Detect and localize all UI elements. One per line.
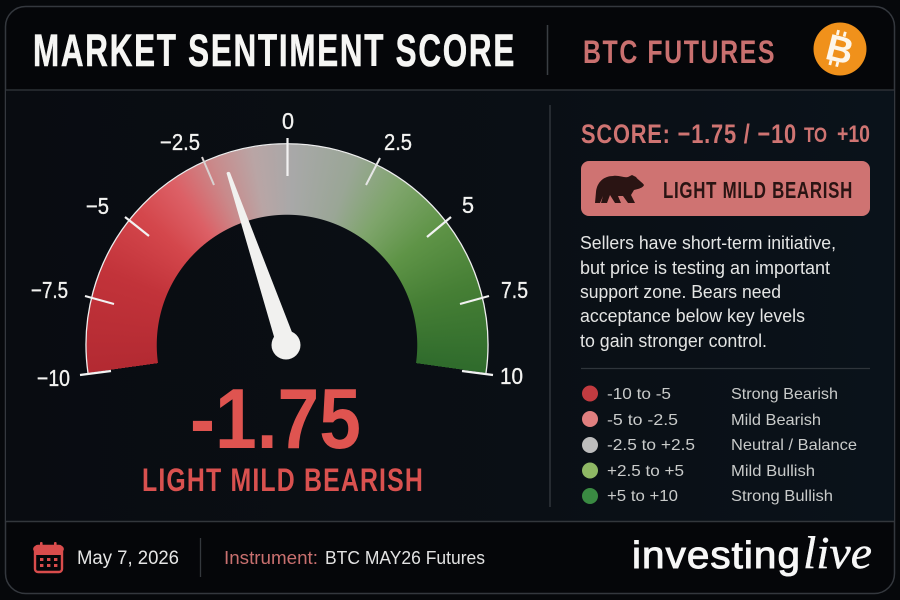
- date: May 7, 2026: [77, 548, 179, 569]
- logo: investing: [632, 535, 801, 577]
- score heading: TO: [804, 124, 827, 147]
- description text: but price is testing an important: [580, 258, 830, 278]
- gauge scale labels: 5: [462, 192, 474, 218]
- gauge scale labels: 2.5: [384, 129, 412, 155]
- description text: acceptance below key levels: [580, 306, 805, 326]
- gauge scale labels: 0: [282, 108, 294, 134]
- needle: [226, 172, 300, 360]
- description text: support zone. Bears need: [580, 282, 781, 302]
- gauge scale labels: −5: [86, 193, 109, 219]
- description text: [580, 233, 836, 351]
- gauge outline and ticks: [80, 138, 493, 375]
- description text: to gain stronger control.: [580, 331, 767, 351]
- legend: -10 to -5: [607, 386, 671, 403]
- legend: -2.5 to +2.5: [607, 437, 695, 454]
- legend: [582, 386, 857, 505]
- legend divider: [581, 368, 870, 370]
- icon: bitcoin: [814, 22, 866, 76]
- legend: +2.5 to +5: [607, 463, 684, 480]
- gauge scale labels: −2.5: [160, 129, 200, 155]
- instrument label: Instrument:: [224, 548, 318, 568]
- icon: bear: [595, 175, 644, 203]
- icon: bitcoin: B: [822, 26, 858, 73]
- description text: Sellers have short-term initiative,: [580, 233, 836, 253]
- score value: -1.75: [190, 372, 361, 467]
- title: MARKET SENTIMENT SCORE: [33, 25, 516, 76]
- gauge scale labels: [31, 108, 528, 391]
- legend: Mild Bearish: [731, 412, 821, 429]
- legend: Mild Bullish: [731, 463, 815, 480]
- sentiment badge: [581, 161, 870, 216]
- gauge scale labels: −7.5: [31, 277, 68, 303]
- logo: [632, 527, 872, 578]
- subtitle: BTC FUTURES: [583, 34, 776, 70]
- gauge scale labels: 10: [500, 363, 523, 389]
- legend: +5 to +10: [607, 488, 678, 505]
- legend: Strong Bullish: [731, 488, 833, 505]
- logo: live: [803, 527, 872, 578]
- score heading: +10: [837, 121, 870, 148]
- gauge arc: [86, 144, 488, 373]
- legend: -5 to -2.5: [607, 412, 678, 429]
- icon: calendar: [33, 542, 64, 572]
- legend: Neutral / Balance: [731, 437, 857, 454]
- gauge scale labels: −10: [37, 365, 70, 391]
- gauge scale labels: 7.5: [501, 277, 528, 303]
- panel divider: [549, 105, 551, 507]
- legend: Strong Bearish: [731, 386, 838, 403]
- header divider: [546, 25, 548, 75]
- score heading: SCORE: −1.75 / −10: [581, 119, 797, 149]
- sentiment label: LIGHT MILD BEARISH: [142, 462, 424, 498]
- footer divider: [200, 538, 202, 577]
- instrument value: BTC MAY26 Futures: [325, 548, 485, 568]
